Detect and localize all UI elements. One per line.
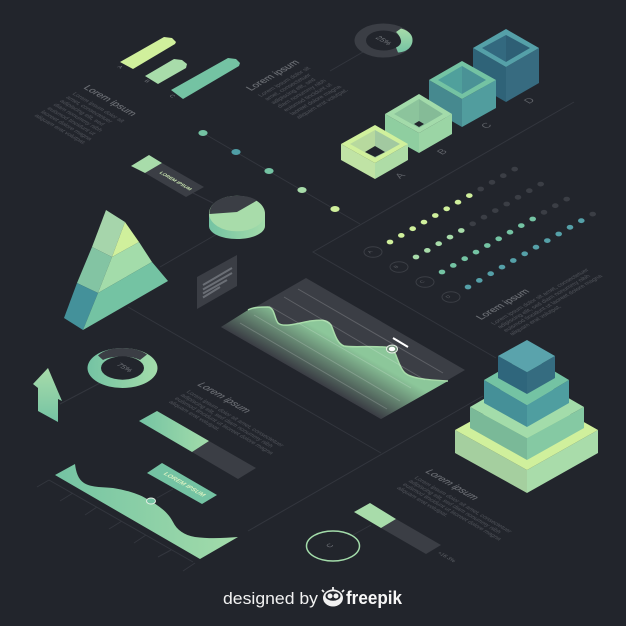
body: Lorem ipsum dolor sit — [258, 66, 313, 98]
body: laoreet dolore magna — [39, 110, 93, 142]
designed by: designed by — [223, 589, 319, 608]
icon: freepik mascot — [322, 587, 344, 606]
body: Lorem ipsum dolor sit amet, consectetuer — [412, 476, 513, 534]
triangular pyramid — [64, 210, 168, 330]
box C — [429, 61, 496, 127]
arrow bars A B C — [115, 37, 240, 99]
marker — [386, 345, 398, 353]
heading: Lorem ipsum — [194, 381, 253, 415]
freepik wordmark: freepik — [346, 588, 403, 608]
box D — [473, 29, 539, 102]
footer credit — [223, 587, 403, 608]
row C — [439, 197, 570, 274]
text block: right — [474, 267, 611, 337]
marker dash — [393, 338, 408, 347]
body: adipiscing elit, sed — [270, 78, 318, 105]
body: euismod tincidunt ut laoreet dolore magna — [172, 397, 275, 456]
box B — [385, 94, 452, 153]
body: aliquam erat volutpat. — [509, 305, 564, 337]
bar B — [145, 59, 187, 84]
bar labels: A — [115, 65, 124, 70]
row A — [387, 167, 518, 244]
body: euismod tincidunt ut — [45, 107, 97, 136]
hole B — [414, 121, 424, 127]
body — [258, 66, 351, 120]
badge letters: B — [393, 264, 401, 270]
body: adipiscing elit, sed — [58, 99, 105, 127]
text block: top left — [32, 84, 139, 146]
body — [32, 92, 125, 146]
donut chart 75% — [88, 348, 158, 388]
box chart A B C D — [341, 29, 539, 181]
heading: Lorem ipsum — [474, 288, 533, 322]
area chart panel — [221, 278, 465, 419]
body: euismod tincidunt ut laoreet dolore magna — [400, 483, 503, 542]
bar labels — [115, 65, 176, 99]
25% label: 25% — [373, 34, 394, 47]
axis ticks — [37, 480, 195, 571]
row badges — [364, 247, 460, 302]
tag: lorem ipsum top — [131, 155, 204, 197]
body: amet, consectetuer — [64, 96, 113, 124]
body: diam nonummy nibh — [277, 79, 328, 109]
bar C — [171, 58, 240, 99]
body: euismod tincidunt ut laoreet dolore magna — [503, 274, 605, 333]
body: aliquam erat volutpat. — [295, 88, 351, 120]
badge letters — [367, 249, 453, 300]
body: diam nonummy nibh — [51, 103, 103, 133]
bar labels: C — [167, 94, 176, 99]
label tag: LOREM IPSUM — [161, 471, 207, 498]
dot matrix chart — [364, 167, 596, 302]
tier 4 — [498, 340, 555, 394]
circle badge C — [306, 531, 360, 561]
timeline dots — [198, 130, 340, 212]
marker — [146, 498, 156, 504]
badge letters: C — [419, 279, 427, 285]
tier 3 — [484, 355, 569, 427]
up arrow — [33, 368, 62, 422]
body: Lorem ipsum dolor sit amet, consectetuer — [491, 268, 591, 326]
donut chart 25% — [354, 24, 413, 58]
tier 1 — [455, 390, 598, 493]
heading: Lorem ipsum — [244, 59, 303, 93]
heading: Lorem ipsum — [422, 468, 481, 502]
box labels — [393, 96, 538, 181]
label tag — [147, 463, 217, 504]
body: laoreet dolore magna — [289, 85, 344, 116]
box A — [341, 125, 408, 179]
row B — [413, 182, 544, 259]
body: Lorem ipsum dolor sit amet, consectetuer — [184, 390, 285, 448]
stacked pyramid — [455, 340, 598, 493]
75% label: 75% — [114, 361, 135, 374]
box labels: D — [522, 96, 538, 106]
body: adipiscing elit, sed diam nonummy nibh — [178, 393, 274, 449]
tier 2 — [470, 374, 584, 460]
body: aliquam erat volutpat. — [32, 114, 87, 146]
percent label: +16.3% — [435, 551, 457, 563]
heading: Lorem ipsum — [80, 84, 139, 118]
row D — [465, 212, 596, 289]
bar A — [120, 37, 176, 69]
text block: middle — [167, 381, 287, 459]
body: euismod tincidunt ut — [283, 83, 334, 113]
box labels: B — [435, 147, 451, 157]
badge letters: D — [445, 294, 453, 300]
body: aliquam erat volutpat. — [167, 400, 222, 432]
tag: lorem ipsum top: LOREM IPSUM — [157, 171, 193, 192]
body: Lorem ipsum dolor sit — [70, 92, 125, 124]
box labels: A — [393, 171, 409, 181]
area chart green — [55, 464, 238, 559]
body: amet, consectetuer — [264, 73, 313, 102]
pie chart 3D — [209, 196, 265, 239]
text block: top centre — [244, 59, 351, 120]
body: adipiscing elit, sed diam nonummy nibh — [497, 274, 592, 330]
progress bar — [139, 411, 256, 479]
badge letters: A — [367, 249, 375, 255]
body: aliquam erat volutpat. — [395, 486, 450, 518]
circle badge C: C — [325, 543, 336, 549]
bar labels: B — [142, 79, 151, 84]
small progress bar — [354, 503, 457, 563]
hole A — [365, 146, 385, 157]
box labels: C — [479, 121, 495, 131]
text block: lower — [395, 468, 515, 545]
note card — [197, 255, 237, 309]
body: adipiscing elit, sed diam nonummy nibh — [406, 479, 502, 535]
